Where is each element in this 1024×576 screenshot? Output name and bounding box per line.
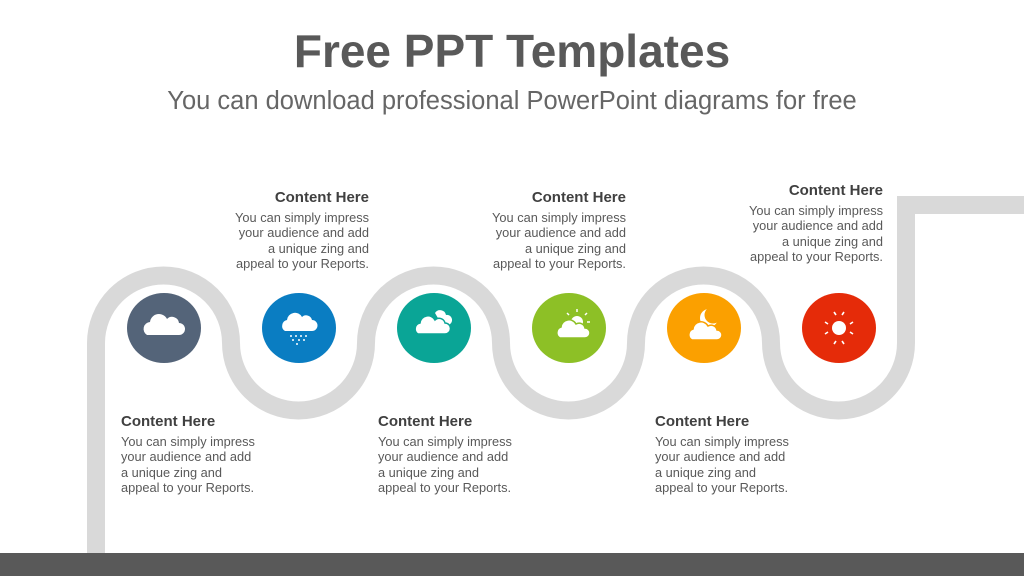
text block 1 (bottom): appeal to your Reports. [121, 480, 254, 495]
subtitle: You can download professional PowerPoint diagrams for free [167, 87, 857, 115]
text block 4 (top): You can simply impress [492, 210, 626, 225]
text block 4 (top) [492, 189, 626, 271]
text block 2 (top): appeal to your Reports. [236, 256, 369, 271]
text block 1 (bottom): a unique zing and [121, 465, 222, 480]
icon: clouds [397, 293, 471, 363]
text block 4 (top): Content Here [532, 189, 626, 206]
footer bar [0, 553, 1024, 576]
text block 2 (top): a unique zing and [268, 241, 369, 256]
text block 5 (bottom): your audience and add [655, 449, 785, 464]
text block 5 (bottom): You can simply impress [655, 434, 789, 449]
icon: rain cloud [262, 293, 336, 363]
text block 4 (top): appeal to your Reports. [493, 256, 626, 271]
text block 3 (bottom): Content Here [378, 413, 472, 430]
icon: moon cloud [667, 293, 741, 363]
text block 2 (top): You can simply impress [235, 210, 369, 225]
title: Free PPT Templates [294, 25, 730, 77]
text block 5 (bottom): Content Here [655, 413, 749, 430]
text block 6 (top): appeal to your Reports. [750, 249, 883, 264]
text block 3 (bottom): You can simply impress [378, 434, 512, 449]
icon: sun [802, 293, 876, 363]
text block 2 (top): your audience and add [239, 225, 369, 240]
text block 5 (bottom) [655, 413, 789, 495]
text block 4 (top): your audience and add [496, 225, 626, 240]
text block 4 (top): a unique zing and [525, 241, 626, 256]
text block 1 (bottom): your audience and add [121, 449, 251, 464]
text block 3 (bottom): your audience and add [378, 449, 508, 464]
text block 1 (bottom) [121, 413, 255, 495]
text block 6 (top): your audience and add [753, 218, 883, 233]
text block 5 (bottom): a unique zing and [655, 465, 756, 480]
text block 6 (top): Content Here [789, 182, 883, 199]
winding path [96, 205, 1024, 553]
text block 2 (top) [235, 189, 369, 271]
text block 1 (bottom): Content Here [121, 413, 215, 430]
text block 1 (bottom): You can simply impress [121, 434, 255, 449]
text block 2 (top): Content Here [275, 189, 369, 206]
icon: cloud [127, 293, 201, 363]
text block 3 (bottom) [378, 413, 512, 495]
text block 6 (top) [749, 182, 883, 264]
text block 3 (bottom): a unique zing and [378, 465, 479, 480]
text block 6 (top): You can simply impress [749, 203, 883, 218]
icon: partly sunny [532, 293, 606, 363]
text block 3 (bottom): appeal to your Reports. [378, 480, 511, 495]
text block 6 (top): a unique zing and [782, 234, 883, 249]
text block 5 (bottom): appeal to your Reports. [655, 480, 788, 495]
